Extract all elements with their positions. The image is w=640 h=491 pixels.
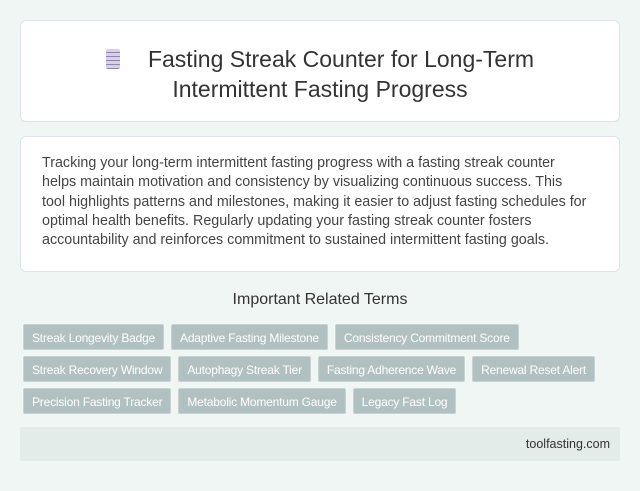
tag list: Metabolic Momentum Gauge	[187, 395, 337, 409]
footer: toolfasting.com	[526, 437, 610, 451]
tag list: Streak Recovery Window	[32, 363, 162, 377]
tag list: Consistency Commitment Score	[344, 331, 510, 345]
footer	[20, 427, 620, 461]
description text: optimal health benefits. Regularly updating your fasting streak counter fosters	[42, 213, 532, 229]
tag list: Legacy Fast Log	[362, 395, 447, 409]
tag list	[23, 324, 595, 414]
title card	[20, 20, 620, 122]
tag list: Adaptive Fasting Milestone	[180, 331, 319, 345]
description text: tool highlights patterns and milestones, making it easier to adjust fasting schedules for	[42, 194, 586, 210]
heading: related terms: Important Related Terms	[233, 291, 407, 308]
tag list: Renewal Reset Alert	[481, 363, 586, 377]
tag list: Streak Longevity Badge	[32, 331, 155, 345]
description text: Tracking your long-term intermittent fasting progress with a fasting streak counter	[42, 155, 555, 171]
title card: Intermittent Fasting Progress	[172, 76, 468, 102]
title card: Fasting Streak Counter for Long-Term	[148, 46, 534, 72]
description text: helps maintain motivation and consistency by visualizing continuous success. This	[42, 174, 562, 190]
tag list: Fasting Adherence Wave	[327, 363, 456, 377]
tag list: Precision Fasting Tracker	[32, 395, 162, 409]
tag list: Autophagy Streak Tier	[187, 363, 302, 377]
icon: document	[106, 49, 120, 69]
description text	[20, 136, 620, 272]
description text: accountability and reinforces commitment to sustained intermittent fasting goals.	[42, 232, 549, 248]
